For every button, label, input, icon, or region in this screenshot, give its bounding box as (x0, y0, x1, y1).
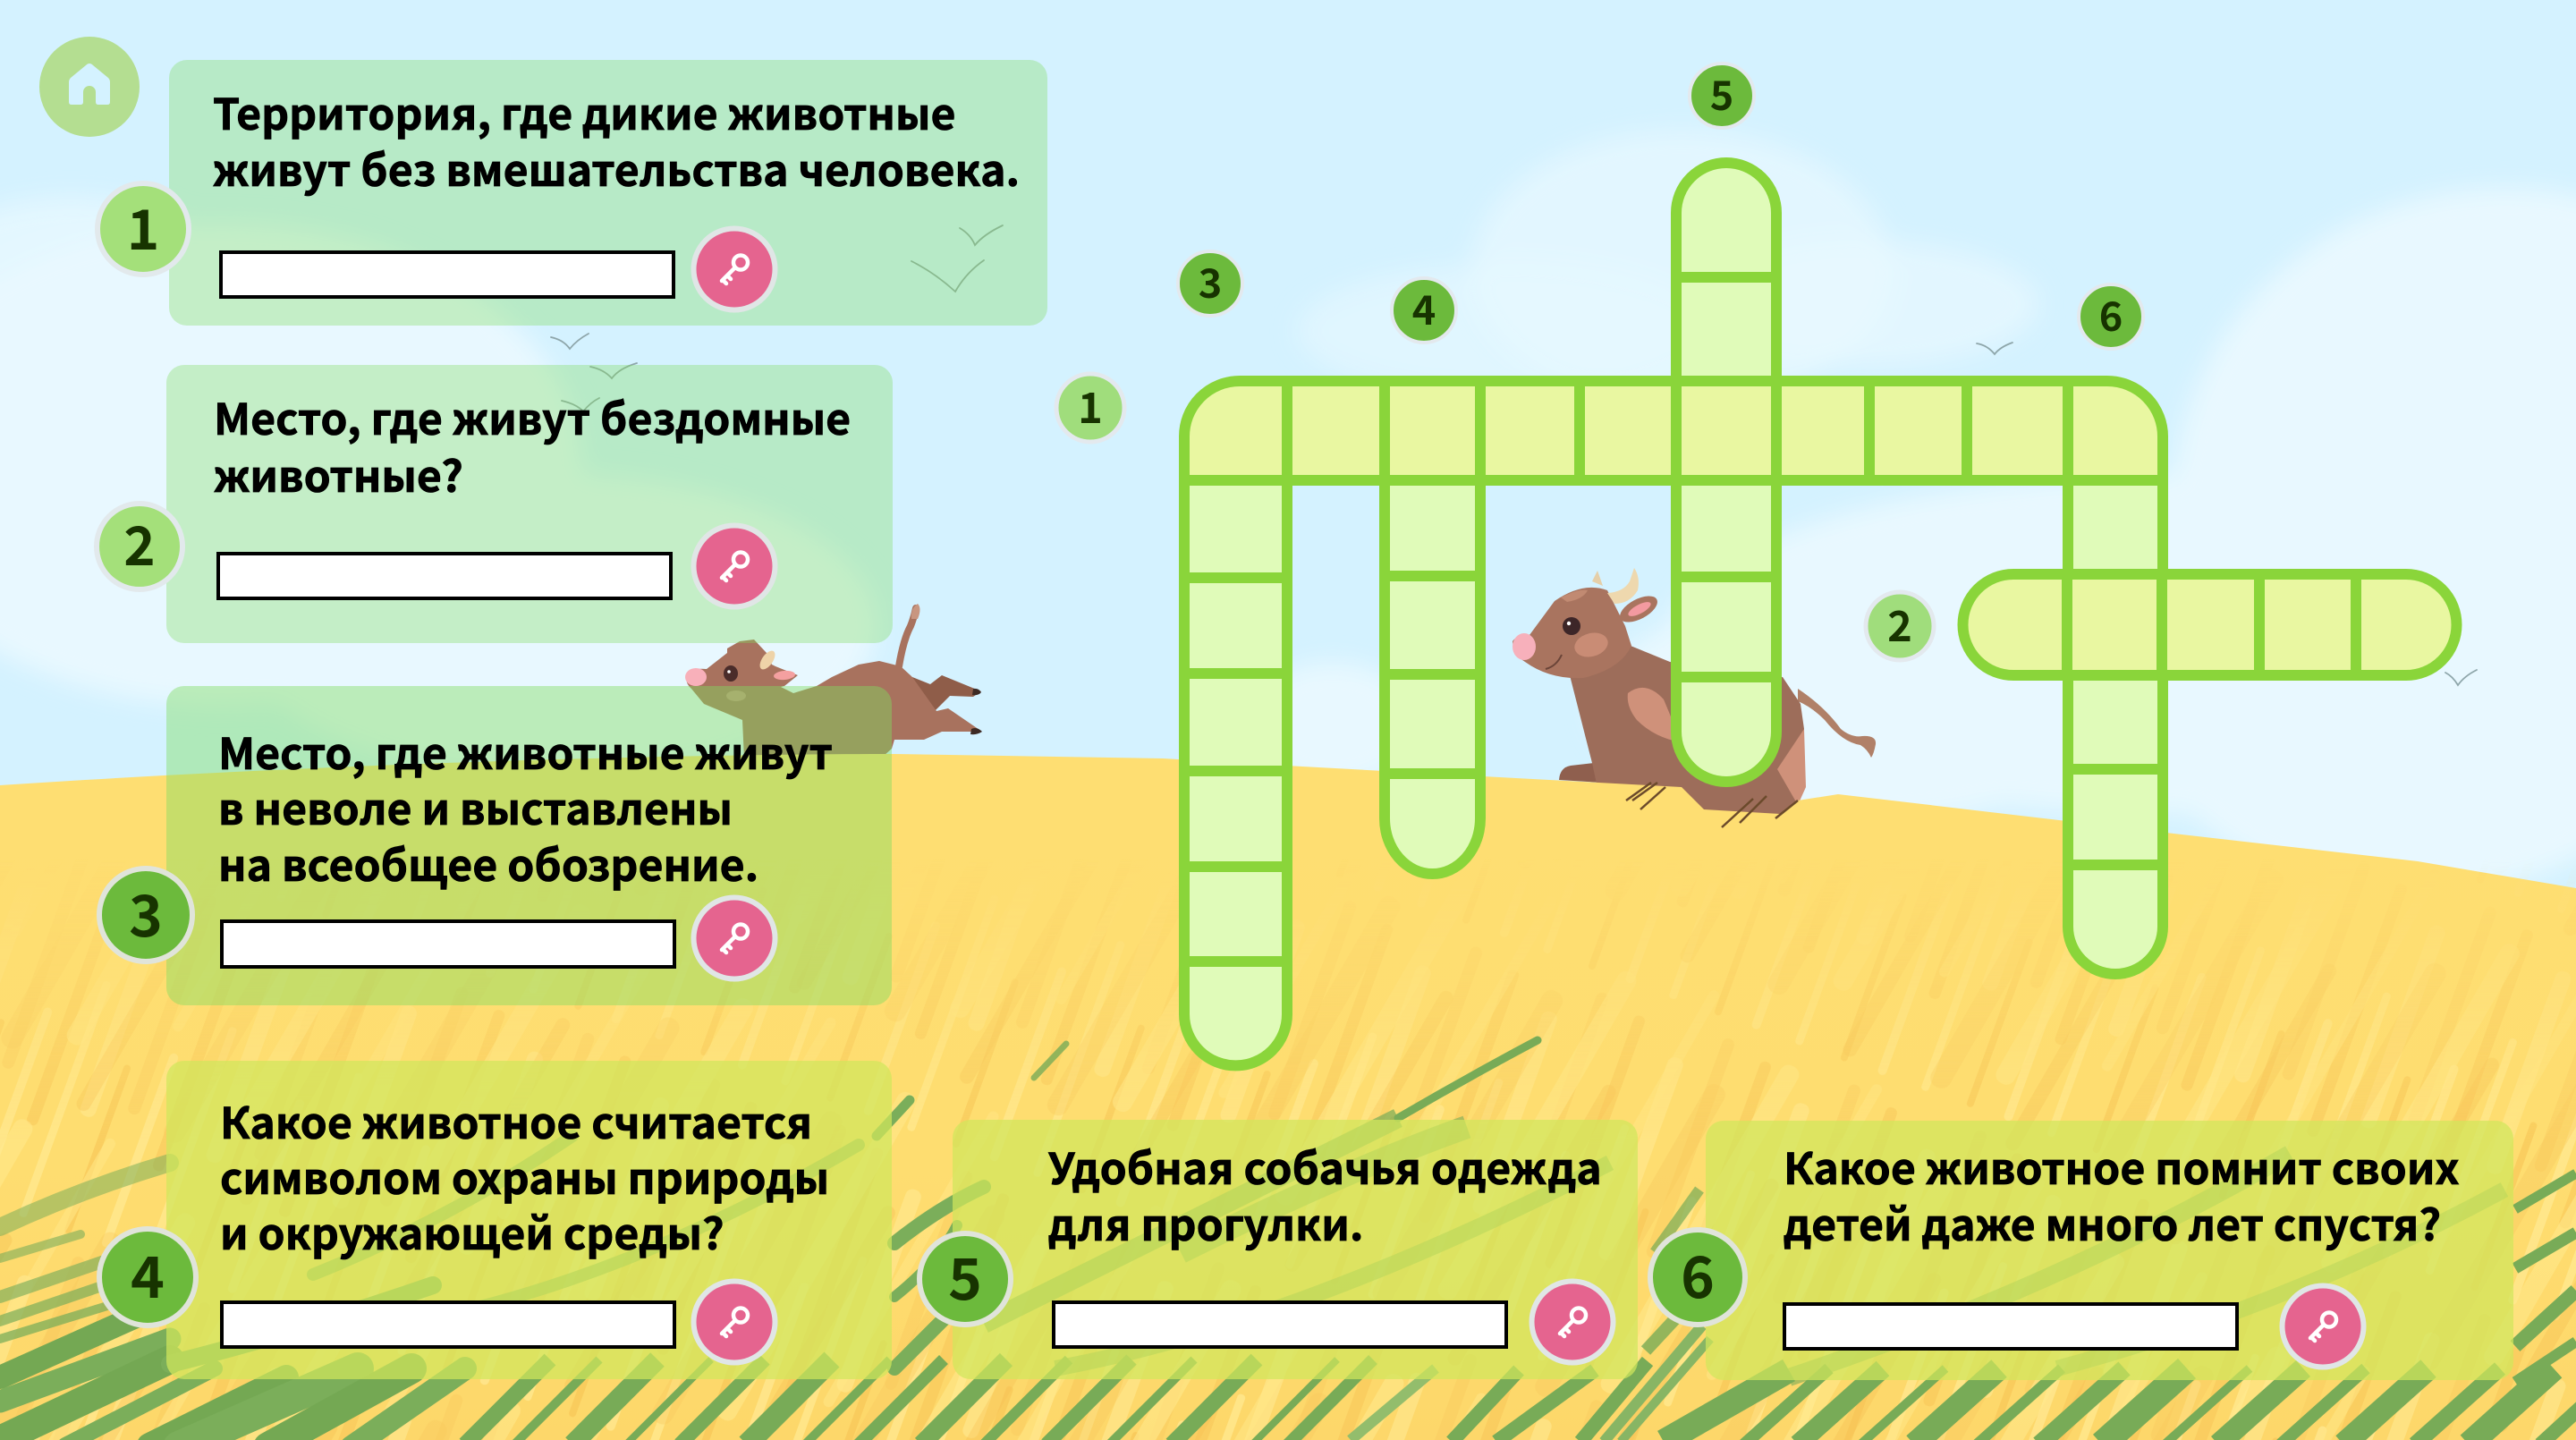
number badge (97, 183, 189, 275)
home button (39, 37, 140, 137)
icon: key button (694, 898, 775, 978)
answer input (222, 1302, 674, 1347)
question text: и окружающей среды? (220, 1199, 724, 1262)
grid label 6 (2079, 284, 2143, 349)
panel background (166, 1061, 892, 1379)
answer input (218, 554, 671, 598)
clouds (0, 130, 2576, 894)
grid label 6: 6 (2099, 284, 2123, 343)
birds (551, 225, 2477, 685)
question text: символом охраны природы (220, 1144, 829, 1207)
grid label 1: 1 (1078, 374, 1103, 436)
icon: house (69, 64, 110, 105)
grid label 3 (1178, 251, 1242, 316)
number badge (919, 1233, 1011, 1325)
number badge (99, 1229, 196, 1326)
answer input (1784, 1304, 2237, 1349)
word 4 column (1385, 479, 1480, 874)
panel 3 (99, 686, 892, 1005)
question text: для прогулки. (1048, 1190, 1363, 1253)
straw tufts over cow (1626, 783, 1798, 827)
number badge: 3 (129, 871, 163, 953)
panel background (166, 365, 893, 643)
field brush texture (0, 859, 2576, 1440)
word 1 row (1184, 381, 2163, 480)
question text: Какое животное помнит своих (1784, 1134, 2460, 1197)
icon: key button (2283, 1286, 2363, 1367)
question text: на всеобщее обозрение. (218, 831, 758, 894)
number badge: 1 (127, 185, 159, 266)
number badge: 6 (1681, 1232, 1715, 1315)
question text: в неволе и выставлены (218, 775, 733, 837)
grid label 2 (1866, 592, 1934, 660)
answer input (221, 252, 674, 297)
yellow field (0, 754, 2576, 1440)
panel 6 (1650, 1121, 2513, 1380)
grass blades: left fan (0, 1100, 984, 1440)
panel 2 (97, 365, 893, 643)
grid label 5: 5 (1710, 64, 1733, 122)
panel 5 (919, 1120, 1638, 1379)
icon: key button (1531, 1281, 1614, 1363)
number badge: 5 (948, 1234, 982, 1317)
question text: животные? (214, 442, 463, 504)
sky background (0, 0, 2576, 984)
panel background (953, 1120, 1638, 1379)
grass blades: centre and right (465, 1040, 2576, 1440)
word 3 column (1184, 479, 1287, 1065)
panel background (169, 60, 1047, 326)
number badge: 2 (123, 504, 156, 581)
question text: Какое животное считается (220, 1088, 812, 1151)
panel background (166, 686, 892, 1005)
icon: key button (694, 229, 775, 309)
cow: leaping calf behind panels (685, 604, 982, 778)
grid label 4 (1392, 278, 1456, 343)
icon: key button (694, 526, 775, 606)
icon: key button (694, 1281, 775, 1363)
grid label 3: 3 (1199, 251, 1222, 309)
grid label 1 (1056, 374, 1124, 442)
question text: Территория, где дикие животные (213, 80, 955, 142)
panel 4 (99, 1061, 892, 1379)
grid number labels (1056, 64, 2143, 660)
number badge: 4 (131, 1232, 165, 1315)
answer input (222, 921, 674, 967)
word 5 column (1676, 163, 1776, 782)
word 6 column (2068, 479, 2163, 974)
question text: Удобная собачья одежда (1048, 1134, 1602, 1197)
word 2 row (1962, 574, 2456, 675)
grid label 4: 4 (1412, 278, 1436, 336)
number badge (99, 868, 192, 961)
cow: sitting calf (1513, 568, 1876, 827)
answer input (1054, 1302, 1506, 1347)
question text: Место, где животные живут (218, 719, 833, 782)
question text: детей даже много лет спустя? (1784, 1190, 2441, 1253)
panel background (1706, 1121, 2513, 1380)
grid label 5 (1690, 64, 1754, 128)
number badge (1650, 1230, 1745, 1325)
grid label 2: 2 (1887, 592, 1912, 654)
number badge (97, 504, 182, 589)
question text: живут без вмешательства человека. (213, 136, 1020, 199)
crossword grid (1184, 163, 2456, 1065)
panel 1 (97, 60, 1047, 326)
question text: Место, где живут бездомные (214, 385, 851, 447)
